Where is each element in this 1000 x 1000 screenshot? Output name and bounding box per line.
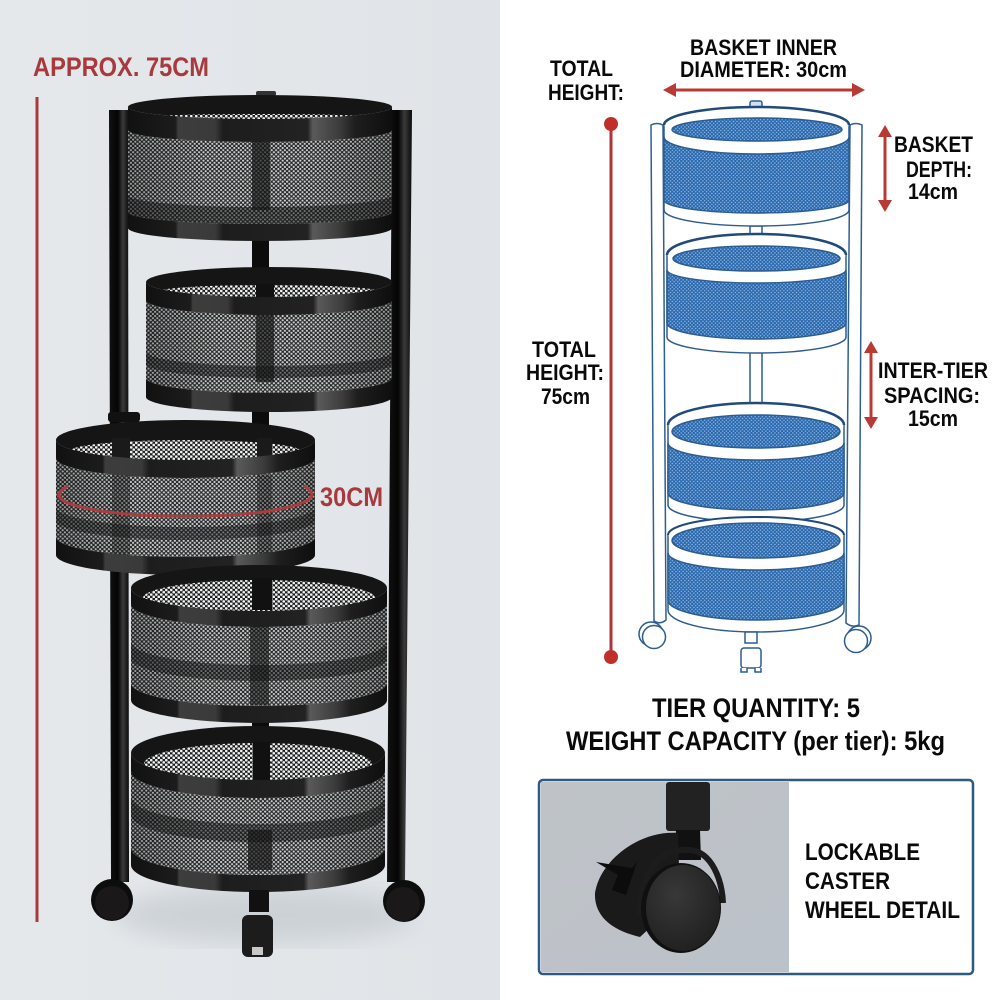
label: inter-tier spacing: SPACING: [884,383,980,408]
height dimension: approx 75cm [33,52,209,922]
arrow: basket inner diameter [663,83,865,97]
panel: product photo background [0,0,500,1000]
product photo: five tier rotating cart [56,91,425,957]
diameter label: 30CM [320,482,383,512]
label: total height 75cm: TOTAL [532,337,596,362]
basket tier 2 [146,267,392,412]
frame posts and centre pole [108,110,412,882]
label: total height 75cm [526,337,604,409]
label: inter-tier spacing: 15cm [908,406,958,431]
label: basket depth [894,132,973,204]
label: total height top [548,56,624,105]
label: total height top: HEIGHT: [548,80,624,105]
total height dimension line [604,117,618,664]
panel: blue line diagram [639,101,871,672]
label: inter-tier spacing [878,358,988,431]
caster wheels [91,879,425,957]
specs text [566,693,945,756]
diagram basket 3 [668,403,844,522]
diagram frame posts [651,101,862,626]
diagram casters [639,622,871,672]
panel: caster wheel detail [539,780,973,974]
caster photo [541,782,789,972]
height dimension: approx 75cm: APPROX. 75CM [33,52,209,82]
specs text: TIER QUANTITY: 5 [652,693,860,723]
floor shadow [115,887,415,943]
label: basket inner diameter: DIAMETER: 30cm [680,57,847,82]
arrow: basket depth [878,125,892,212]
label: basket depth: 14cm [908,179,958,204]
label: total height 75cm: 75cm [541,384,590,409]
specs text: WEIGHT CAPACITY (per tier): 5kg [566,726,945,756]
label: inter-tier spacing: INTER-TIER [878,358,988,383]
caster label: WHEEL DETAIL [805,897,960,924]
basket tier 5 [131,726,385,892]
caster label [805,839,960,924]
label: total height 75cm: HEIGHT: [526,360,604,385]
diagram basket 2 [667,234,846,353]
red diameter ring [59,486,312,516]
basket tier 3, swung out, with red diameter ring [56,420,315,575]
label: basket depth: DEPTH: [906,157,972,182]
caster label: LOCKABLE [805,839,920,866]
label: total height top: TOTAL [550,56,613,81]
arrow: inter-tier spacing [864,341,878,429]
basket tier 1 [128,91,392,241]
label: basket inner diameter: BASKET INNER [690,35,837,60]
label: basket depth: BASKET [894,132,973,157]
diagram basket 4 [668,517,844,632]
label: basket inner diameter [680,35,847,82]
diagram basket 1 [664,107,849,226]
basket tier 4 [131,565,387,723]
caster label: CASTER [805,868,890,895]
